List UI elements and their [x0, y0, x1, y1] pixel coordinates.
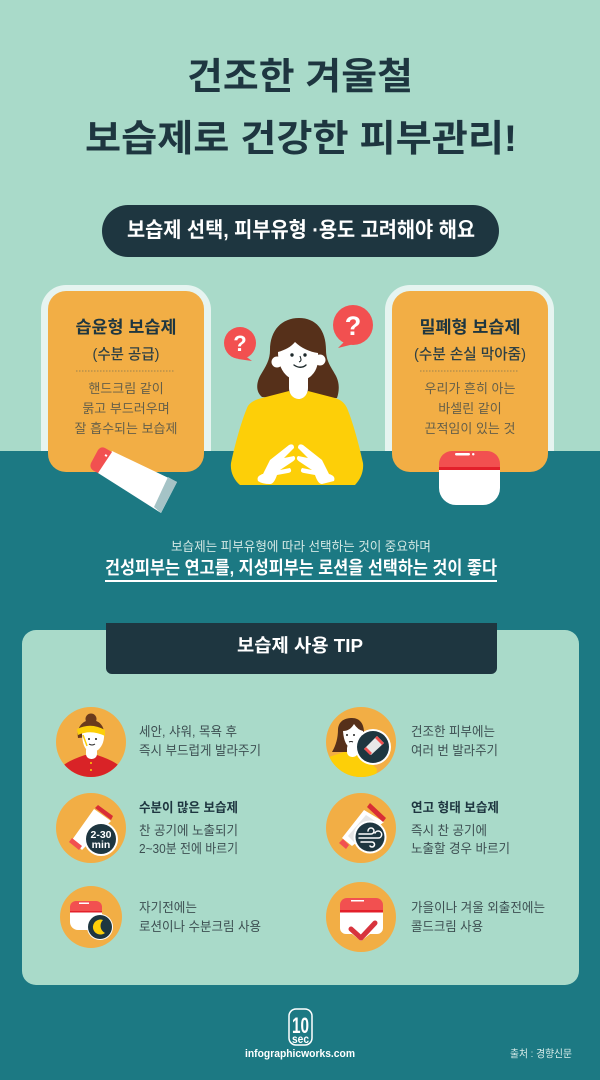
subtitle pill	[102, 205, 499, 257]
tip 1: 세안, 샤워, 목욕 후	[139, 724, 237, 739]
hands	[258, 444, 295, 484]
logo: 10 sec	[289, 1009, 312, 1046]
subtitle pill: 보습제 선택, 피부유형 ·용도 고려해야 해요	[127, 219, 475, 242]
panel heading	[106, 623, 497, 674]
footer url: infographicworks.com	[245, 1048, 355, 1060]
text block: key message: 보습제는 피부유형에 따라 선택하는 것이 중요하며	[171, 539, 431, 554]
tip 3	[60, 886, 261, 948]
tip 2: 수분이 많은 보습제	[139, 800, 238, 815]
neck	[289, 372, 308, 399]
panel: occlusive moisturizer: 우리가 흔히 아는	[425, 381, 516, 396]
icon: tube	[90, 447, 177, 513]
icon: jar with check mark	[326, 882, 396, 952]
tip 4: 건조한 피부에는	[411, 724, 495, 739]
tip 5: 연고 형태 보습제	[411, 800, 499, 815]
panel: humectant moisturizer: 묽고 부드러우며	[82, 401, 170, 416]
icon: right question bubble	[333, 305, 373, 348]
panel: humectant moisturizer: (수분 공급)	[92, 346, 160, 363]
icon: tube with 2-30 min badge: 2-30	[90, 829, 112, 841]
title: 보습제로 건강한 피부관리!	[85, 118, 517, 159]
icon: tube with 2-30 min badge: min	[92, 839, 110, 851]
tip 4: 여러 번 발라주기	[411, 743, 498, 758]
icon: jar	[439, 451, 500, 505]
sweater	[231, 391, 363, 485]
icon: tube with 2-30 min badge	[56, 793, 126, 863]
tip 1: 즉시 부드럽게 발라주기	[139, 743, 261, 758]
panel: tips	[22, 623, 579, 985]
title: 건조한 겨울철	[187, 56, 413, 97]
illustration: woman with question marks	[224, 305, 373, 485]
icon: left question bubble	[224, 327, 256, 361]
tip 1	[56, 707, 261, 782]
panel: occlusive moisturizer: (수분 손실 막아줌)	[414, 346, 526, 363]
tip 6: 콜드크림 사용	[411, 919, 483, 934]
tip 5: 노출할 경우 바르기	[411, 841, 510, 856]
logo: 10 sec: 10	[292, 1013, 309, 1038]
panel: occlusive moisturizer: 바셀린 같이	[438, 401, 502, 416]
panel: humectant moisturizer	[41, 285, 211, 472]
tip 6	[326, 882, 545, 952]
hair	[257, 318, 339, 400]
tip 5	[326, 793, 510, 863]
face	[278, 342, 318, 380]
panel heading: 보습제 사용 TIP	[237, 635, 363, 656]
tip 2	[56, 793, 238, 863]
panel: occlusive moisturizer	[385, 285, 554, 472]
tip 5: 즉시 찬 공기에	[411, 823, 487, 838]
tip 6: 가을이나 겨울 외출전에는	[411, 900, 545, 915]
title	[85, 56, 517, 159]
panel: humectant moisturizer: 핸드크림 같이	[88, 381, 164, 396]
panel: occlusive moisturizer: 끈적임이 있는 것	[425, 421, 515, 436]
icon: woman after washing	[56, 707, 126, 782]
tip 3: 로션이나 수분크림 사용	[139, 919, 261, 934]
tip 4	[326, 707, 496, 777]
text block: key message	[105, 539, 497, 582]
panel: occlusive moisturizer: 밀폐형 보습제	[420, 318, 520, 337]
text block: key message: 건성피부는 연고를, 지성피부는 로션을 선택하는 것이 좋다	[105, 558, 497, 578]
icon: woman with tube badge	[326, 707, 396, 777]
source credit: 출처 : 경향신문	[510, 1047, 572, 1060]
tip 2: 찬 공기에 노출되기	[139, 823, 238, 838]
icon: tube with wind badge	[326, 793, 396, 863]
icon: jar with moon	[60, 886, 122, 948]
panel: humectant moisturizer: 잘 흡수되는 보습제	[75, 421, 177, 436]
icon: right question bubble: ?	[345, 311, 361, 341]
logo: 10 sec: sec	[292, 1032, 309, 1046]
tip 2: 2~30분 전에 바르기	[139, 841, 238, 856]
icon: left question bubble: ?	[233, 331, 247, 356]
panel: humectant moisturizer: 습윤형 보습제	[76, 318, 176, 337]
tip 3: 자기전에는	[139, 900, 197, 915]
